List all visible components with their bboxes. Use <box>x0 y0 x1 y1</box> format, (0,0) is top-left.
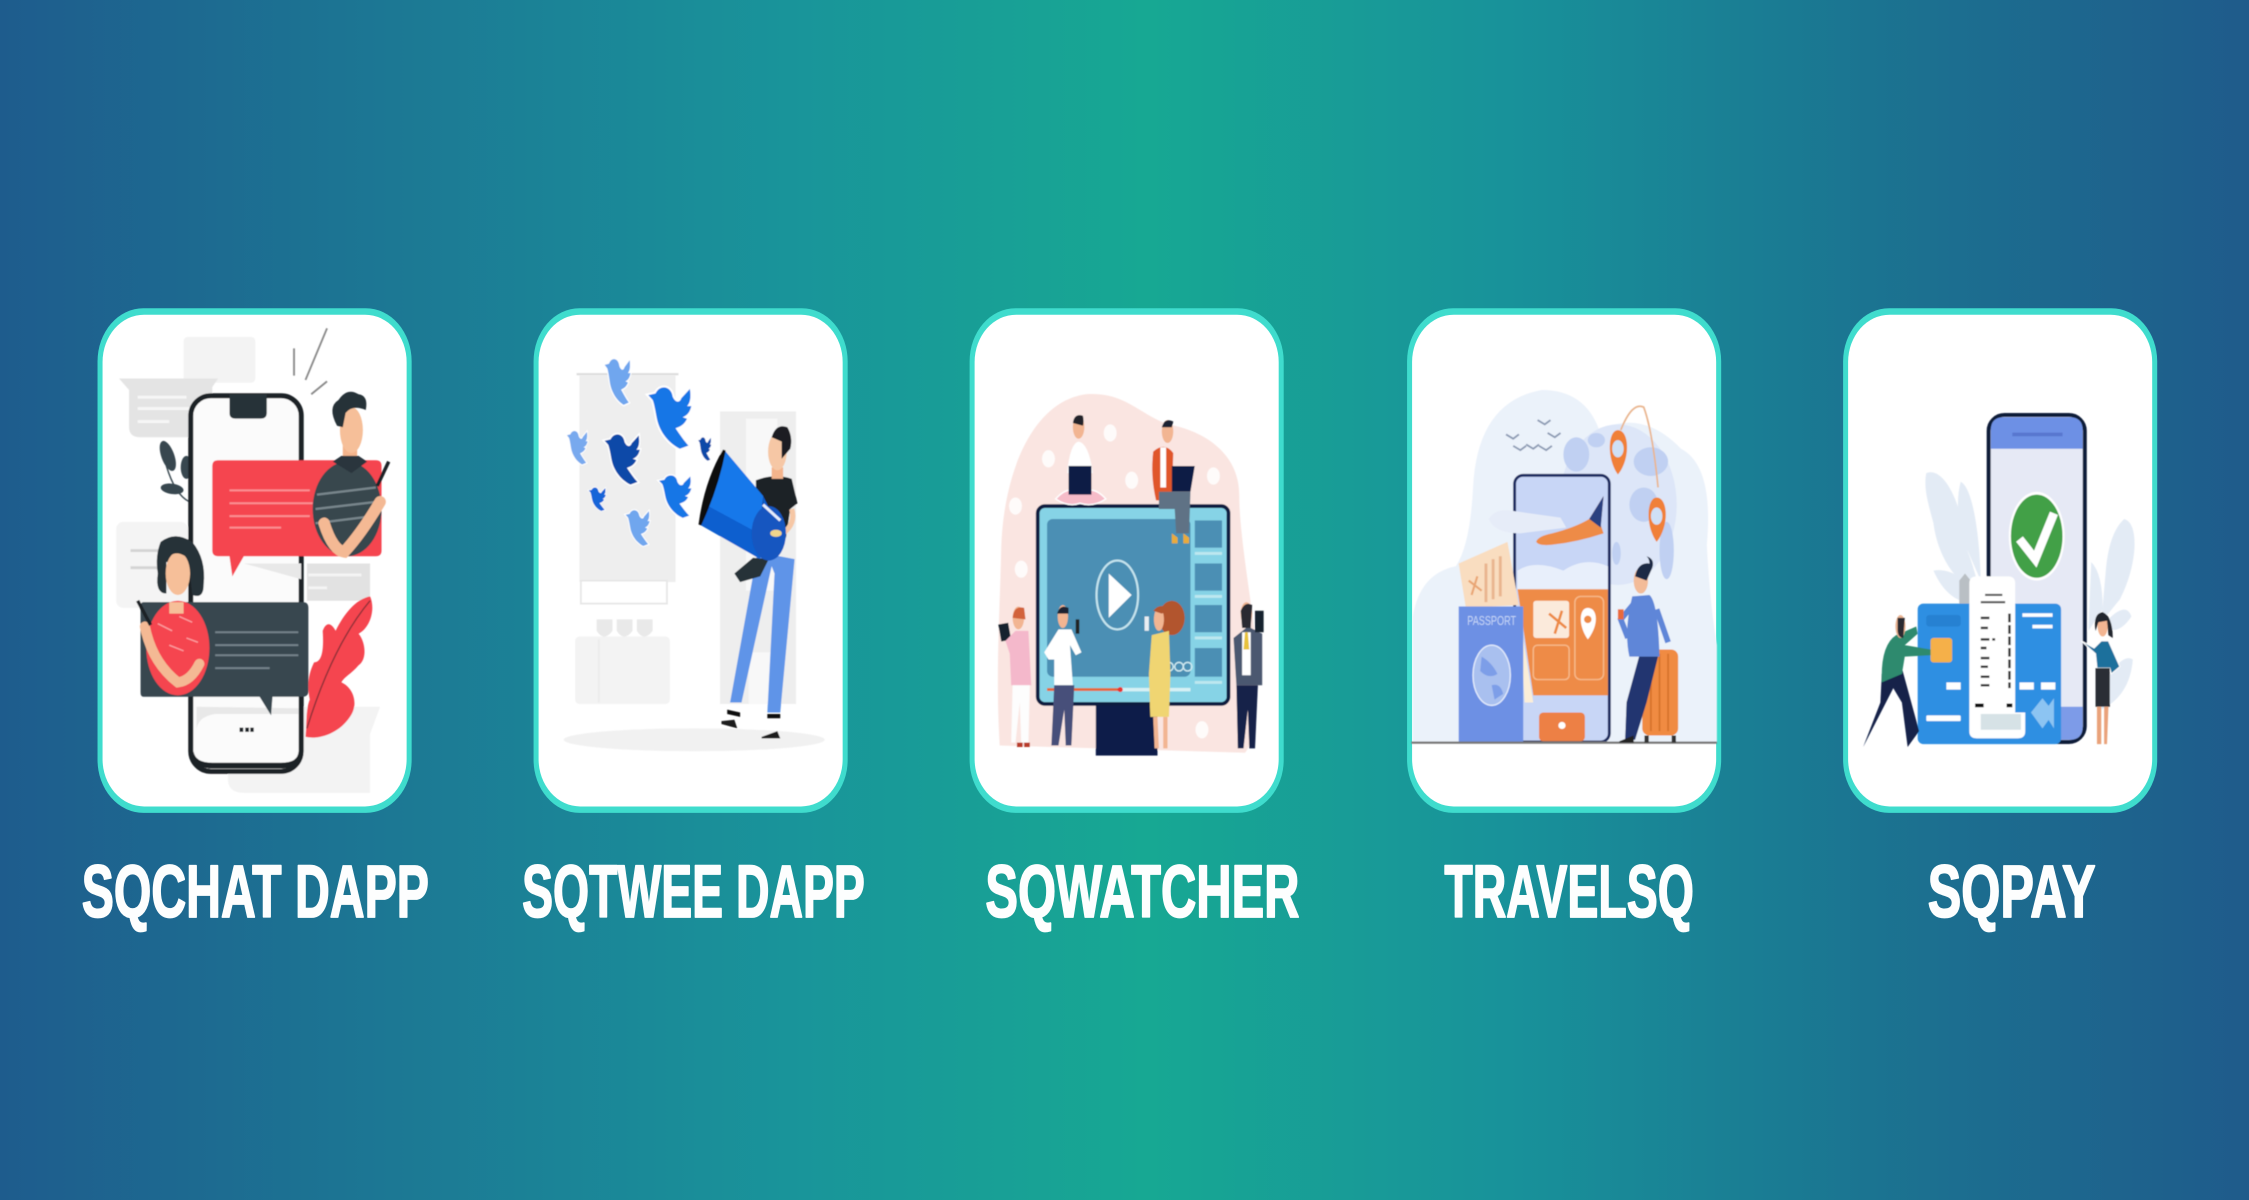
dark chat bubble <box>141 602 308 715</box>
card frame <box>98 308 412 813</box>
man in suit <box>1234 627 1262 685</box>
man <box>313 462 382 556</box>
monitor <box>1096 703 1157 756</box>
woman in yellow <box>1159 601 1185 635</box>
illustration: travel app <box>1411 390 1717 743</box>
check badge <box>2009 492 2065 581</box>
flight arc <box>1621 406 1658 487</box>
panel: SQCHAT DAPP <box>82 308 429 933</box>
globe <box>1559 424 1677 585</box>
phone <box>1989 415 2085 742</box>
label: TRAVELSQ <box>1444 850 1694 933</box>
illustration: payment <box>1863 415 2135 747</box>
label: SQWATCHER <box>985 850 1299 933</box>
illustration: travel app: PASSPORT <box>1467 613 1516 628</box>
label: SQTWEE DAPP <box>522 850 865 933</box>
card frame <box>534 308 848 813</box>
passport <box>1459 606 1523 743</box>
illustration: megaphone and birds <box>564 359 825 751</box>
panel: SQTWEE DAPP <box>522 308 865 933</box>
card frame <box>1843 308 2157 813</box>
sitting woman <box>1056 490 1106 505</box>
ground line <box>1411 742 1717 744</box>
card frame <box>1407 308 1721 813</box>
dark leaves <box>156 439 192 496</box>
sitting man <box>1152 447 1173 500</box>
receipt <box>1969 576 2025 738</box>
birds <box>567 359 711 546</box>
pink woman <box>998 623 1011 641</box>
phone <box>1515 475 1609 742</box>
illustration: video screen with audience <box>998 394 1264 756</box>
panel: SQPAY <box>1843 308 2157 933</box>
birds flock <box>1506 420 1561 450</box>
panel: TRAVELSQ <box>1407 308 1721 933</box>
man pushing <box>1863 668 1919 747</box>
woman pointing <box>2081 641 2120 674</box>
megaphone <box>734 558 769 582</box>
label: SQPAY <box>1928 850 2096 933</box>
red leaf <box>306 596 372 738</box>
traveller <box>1625 655 1658 740</box>
progress bar <box>1047 689 1119 691</box>
woman <box>146 601 209 695</box>
phone <box>191 396 301 771</box>
person with megaphone <box>730 552 795 713</box>
label: SQCHAT DAPP <box>82 850 429 933</box>
ticket <box>1459 542 1519 608</box>
background foliage <box>1925 472 2135 710</box>
panel: SQWATCHER <box>970 308 1299 933</box>
illustration: chat phone <box>116 328 389 793</box>
man in white <box>1044 629 1081 685</box>
card frame <box>970 308 1284 813</box>
credit card <box>1959 573 1971 616</box>
typing dots <box>240 728 254 731</box>
red chat bubble <box>212 460 382 576</box>
play button <box>1097 561 1138 629</box>
airplanes <box>1489 510 1566 533</box>
location pins <box>1610 430 1627 475</box>
suitcase <box>1642 649 1678 735</box>
